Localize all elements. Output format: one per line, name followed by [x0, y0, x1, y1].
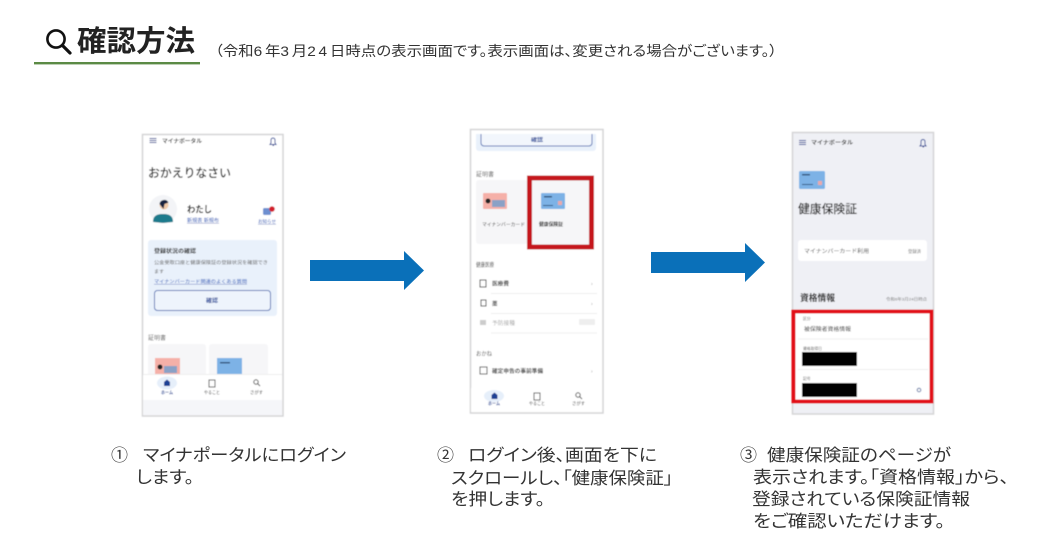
- icon: bell: [920, 140, 926, 147]
- row: tax return: 確定申告の事前準備: [492, 367, 543, 375]
- bottom navigation: さがす: [572, 400, 585, 407]
- phone screen 1: [142, 134, 283, 416]
- redacted value 2: [802, 383, 857, 397]
- card usage row: [798, 240, 927, 261]
- icon: menu: [150, 138, 156, 142]
- page title: 健康保険証: [798, 201, 857, 216]
- step 3 caption: [740, 446, 1009, 531]
- panel: registration status: [148, 240, 277, 316]
- phone screen 2: [470, 130, 603, 413]
- panel: registration status: ます: [154, 269, 164, 275]
- card usage row: 登録済: [908, 248, 921, 255]
- field label: symbol: 記号: [803, 376, 811, 381]
- card: my number: マイナンバーカード: [482, 222, 525, 228]
- icon: insurance card: [799, 171, 825, 189]
- step 3 caption: 表示されます。「資格情報」から、: [753, 468, 1009, 487]
- card: my number: [148, 344, 206, 376]
- bottom navigation: [143, 374, 282, 415]
- bottom navigation: ホーム: [488, 400, 500, 406]
- step 2 caption: ②: [437, 446, 454, 465]
- step 1 caption: マイナポータルにログイン: [143, 446, 346, 465]
- icon: bell: [270, 138, 276, 146]
- card: health insurance: [209, 344, 268, 376]
- card: my number: [476, 180, 528, 244]
- icon: notifications: [263, 206, 275, 215]
- user name: わたし: [187, 204, 212, 214]
- bottom navigation: [471, 388, 602, 412]
- row: tax return: ›: [591, 369, 593, 375]
- icon: user avatar: [149, 195, 177, 223]
- step 3 caption: 健康保険証のページが: [767, 446, 951, 465]
- title underline: [34, 62, 200, 64]
- header: [34, 25, 777, 64]
- top panel remainder: 確認: [531, 136, 543, 144]
- row: medical expenses: 医療費: [492, 280, 509, 288]
- row: tax return: [480, 367, 593, 375]
- row: medical expenses: ›: [591, 282, 593, 288]
- row: vaccination: [480, 319, 597, 333]
- user link: 新規表 新規布: [187, 217, 219, 224]
- reference date: 令和6年3月24日時点: [886, 296, 927, 302]
- phone screen 3: [792, 132, 934, 414]
- row: vaccination: 予防接種: [492, 319, 516, 327]
- icon: menu: [799, 140, 806, 144]
- panel description: 公金受取口座と健康保険証の登録状況を確認でき: [154, 259, 268, 266]
- greeting: おかえりなさい: [148, 166, 231, 180]
- step 2 caption: [437, 446, 673, 509]
- row: medicine: 薬: [492, 300, 498, 308]
- bottom navigation: ホーム: [161, 389, 173, 395]
- arrow 2: [651, 243, 765, 282]
- step 3 caption: をご確認いただけます。: [753, 512, 945, 531]
- section heading: 資格情報: [800, 292, 835, 303]
- field value: category: 被保険者資格情報: [804, 325, 852, 333]
- confirm button: 確認: [206, 296, 219, 304]
- panel heading: 登録状況の確認: [154, 247, 197, 255]
- card usage row: マイナンバーカード利用: [804, 247, 869, 255]
- step 2 caption: を押します。: [451, 490, 545, 509]
- icon: eye toggle: [917, 388, 921, 392]
- medical section label: 健康医療: [476, 261, 494, 269]
- notifications label: お知らせ: [258, 218, 276, 225]
- step 2 caption: スクロールし、「健康保険証」: [451, 469, 673, 488]
- tax section label: おかね: [476, 351, 492, 358]
- card: health insurance with red highlight: [530, 178, 592, 247]
- step 1 caption: します。: [136, 468, 194, 487]
- arrow 1: [310, 251, 424, 290]
- step 1 caption: ①: [111, 446, 128, 465]
- top panel remainder: [476, 134, 596, 151]
- bottom navigation: やること: [204, 389, 220, 396]
- row: medicine: ›: [591, 302, 593, 308]
- app name: マイナポータル: [162, 137, 203, 145]
- icon: magnifying glass: [47, 30, 70, 53]
- card: health insurance with red highlight: 健康保険証: [539, 221, 563, 228]
- redacted value 1: [802, 352, 857, 366]
- bottom navigation: さがす: [250, 389, 263, 396]
- app name: マイナポータル: [811, 138, 854, 146]
- step 3 caption: ③: [740, 446, 757, 465]
- certificates label: 証明書: [148, 334, 166, 342]
- qualification panel with red highlight: [794, 312, 932, 402]
- date note: （令和 6年3月24日時点の表示画面です。表示画面は、変更される場合がございます。）: [215, 43, 777, 59]
- bottom navigation: やること: [529, 400, 545, 407]
- certificates label: 証明書: [476, 170, 494, 178]
- row: medicine: [481, 300, 597, 314]
- title: 確認方法: [77, 25, 195, 58]
- field label: category: 区分: [803, 316, 811, 321]
- step 1 caption: [111, 446, 346, 487]
- step 2 caption: ログイン後、画面を下に: [468, 446, 657, 465]
- field label: issue date: 資格取得日: [803, 346, 822, 351]
- row: medical expenses: [480, 280, 597, 294]
- step 3 caption: 登録されている保険証情報: [752, 490, 970, 509]
- panel link: マイナンバーカード関連のよくある質問: [154, 278, 247, 285]
